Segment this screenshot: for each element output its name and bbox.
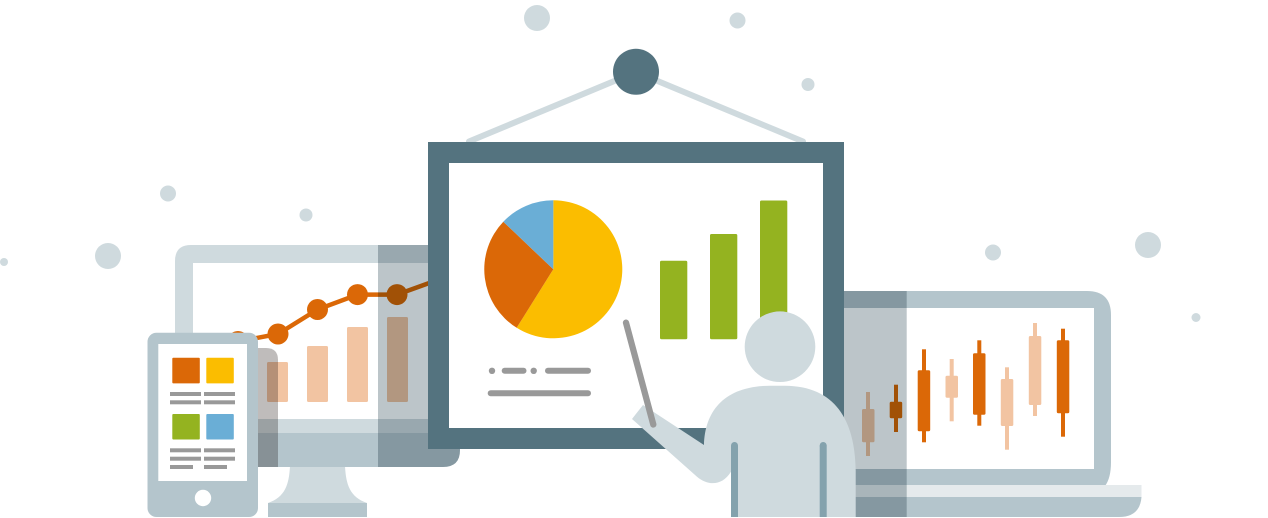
background dots — [0, 5, 1200, 322]
candle 5 — [973, 340, 986, 426]
pointer stick — [626, 323, 653, 424]
board caption lines — [488, 368, 591, 396]
arm seam caps — [731, 442, 827, 449]
pie slice: orange — [484, 222, 553, 328]
candle 7 — [1029, 323, 1041, 416]
tablet body — [148, 333, 258, 517]
hanger lines — [469, 72, 803, 142]
candle 4 — [946, 359, 958, 421]
laptop screen — [830, 308, 1094, 469]
desktop monitor — [175, 245, 460, 517]
pie chart — [484, 200, 622, 338]
board bar chart — [660, 200, 787, 339]
monitor stand — [268, 466, 367, 517]
candle 8 — [1057, 329, 1069, 437]
monitor bar chart — [267, 317, 408, 402]
candlestick chart — [862, 323, 1069, 456]
pie slice: yellow — [517, 200, 622, 338]
tablet text lines — [170, 392, 235, 469]
laptop — [830, 291, 1142, 517]
board frame — [428, 142, 844, 449]
candle 1 — [862, 392, 874, 456]
hanger knob — [613, 49, 659, 95]
monitor line chart — [228, 282, 432, 352]
presenter head — [745, 311, 815, 382]
monitor frame — [175, 245, 460, 467]
candle 6 — [1001, 367, 1013, 450]
tablet — [148, 333, 258, 517]
laptop frame — [830, 291, 1111, 486]
presenter — [626, 311, 856, 517]
arm seam right — [820, 446, 827, 517]
board shadow on monitor — [378, 245, 460, 467]
candle 2 — [890, 385, 902, 432]
presenter body and arm — [632, 386, 856, 517]
pie slice: blue — [503, 200, 553, 269]
tablet shadow — [250, 348, 278, 467]
tablet tiles — [172, 358, 234, 440]
arm seam left — [731, 446, 738, 517]
candle 3 — [918, 349, 930, 442]
laptop base — [830, 485, 1142, 517]
presentation board — [428, 142, 844, 449]
tablet screen — [158, 344, 247, 481]
board screen — [449, 163, 823, 428]
board shadow on laptop — [830, 291, 907, 517]
tablet button — [195, 490, 211, 506]
